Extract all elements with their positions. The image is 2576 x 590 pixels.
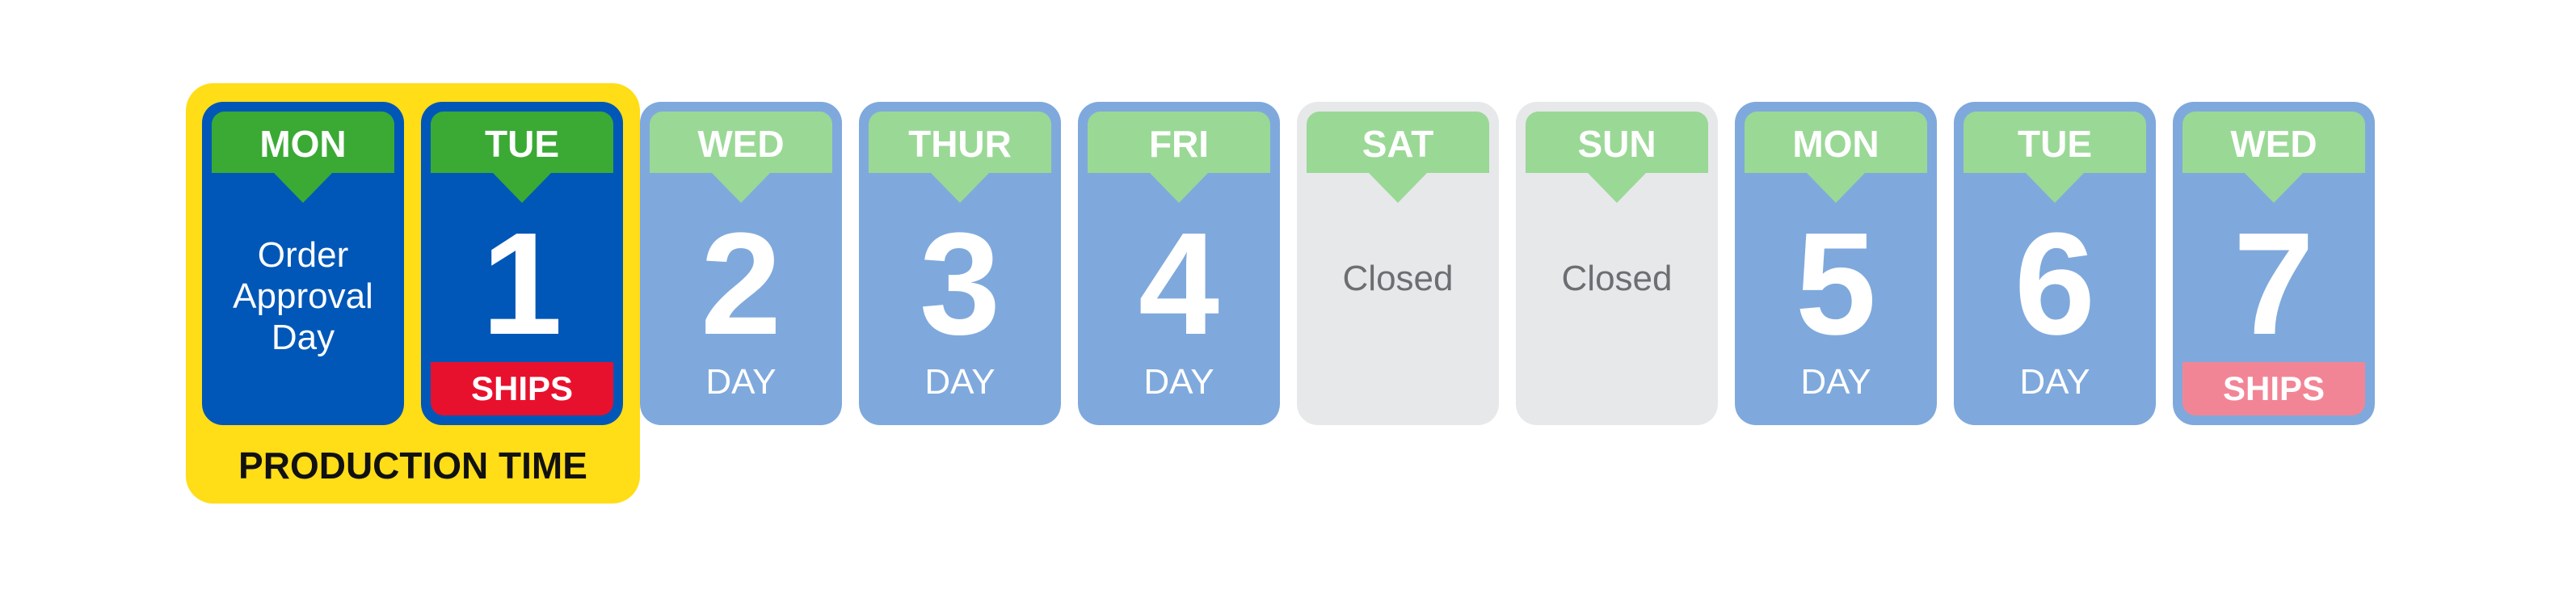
card: MON order approval <box>202 102 404 425</box>
card: MON 5: MON <box>1792 123 1879 165</box>
card: SAT closed: SAT <box>1362 123 1433 165</box>
card: SUN closed: Closed <box>1562 259 1672 298</box>
panel: production time <box>186 83 640 504</box>
card: THUR 3: 3 <box>920 203 1000 365</box>
card: TUE 1 ships <box>421 102 623 425</box>
card: TUE 1 ships: 1 <box>482 203 562 365</box>
card: WED 2: WED <box>697 123 785 165</box>
card: WED 7 ships: WED <box>2230 123 2317 165</box>
card: FRI 4: DAY <box>1143 362 1214 402</box>
card: TUE 6: 6 <box>2014 203 2095 365</box>
card: WED 2: 2 <box>701 203 781 365</box>
text: order approval day: Day <box>271 318 335 357</box>
card: MON 5: DAY <box>1800 362 1871 402</box>
card: SAT closed <box>1297 102 1499 425</box>
card: TUE 6: DAY <box>2019 362 2090 402</box>
card: THUR 3: THUR <box>908 123 1012 165</box>
card: WED 7 ships <box>2173 102 2375 425</box>
card: FRI 4 <box>1078 102 1280 425</box>
card: THUR 3 <box>859 102 1061 425</box>
card: TUE 1 ships: SHIPS <box>471 369 573 407</box>
card: WED 7 ships: 7 <box>2233 203 2314 365</box>
text: order approval day: Approval <box>233 276 373 316</box>
card: TUE 6 <box>1954 102 2156 425</box>
card: MON order approval: MON <box>259 123 347 165</box>
text: order approval day <box>233 235 373 357</box>
card: THUR 3: DAY <box>924 362 995 402</box>
card: MON 5 <box>1735 102 1937 425</box>
text: order approval day: Order <box>258 235 348 275</box>
card: SAT closed: Closed <box>1343 259 1453 298</box>
card: TUE 6: TUE <box>2018 123 2092 165</box>
card: FRI 4: 4 <box>1139 203 1219 365</box>
card: WED 7 ships: SHIPS <box>2223 369 2325 407</box>
production time label: PRODUCTION TIME <box>238 445 587 487</box>
card: SUN closed <box>1516 102 1718 425</box>
card: TUE 1 ships: TUE <box>485 123 559 165</box>
card: WED 2: DAY <box>705 362 777 402</box>
card: MON 5: 5 <box>1795 203 1876 365</box>
card: WED 2 <box>640 102 842 425</box>
card: SUN closed: SUN <box>1577 123 1656 165</box>
card: FRI 4: FRI <box>1149 123 1209 165</box>
